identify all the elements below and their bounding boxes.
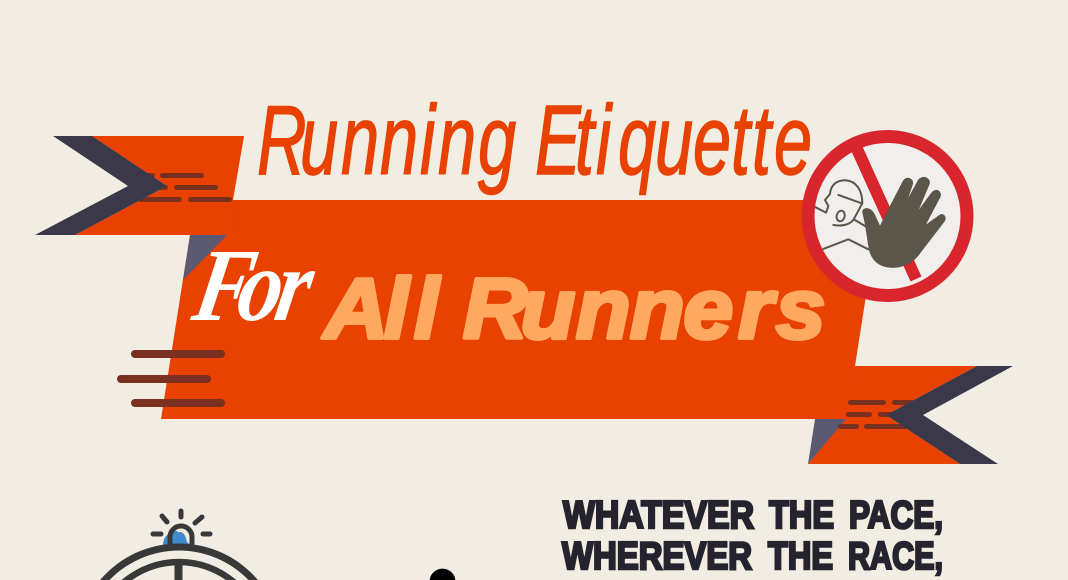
title: Running Etiquette: Running <box>257 85 516 195</box>
banner: upper-left ribbon tail <box>35 136 244 235</box>
title: Running Etiquette: Etiquette <box>535 85 812 195</box>
slogan text: WHEREVER <box>562 535 752 578</box>
subtitle: For: For <box>185 228 324 344</box>
icon: raised hand <box>863 178 944 267</box>
slogan text: THE <box>768 535 833 578</box>
icon: wheel with siren <box>100 511 258 580</box>
slogan text: PACE, <box>849 494 943 537</box>
wheel arcs <box>100 543 258 580</box>
banner: fold shadow upper <box>183 235 227 280</box>
icon: runner silhouette head <box>430 569 455 580</box>
slogan text <box>562 494 943 578</box>
banner: main ribbon <box>161 200 881 419</box>
title banner <box>35 136 1013 464</box>
slogan text: THE <box>769 494 834 537</box>
banner: large speed dashes <box>117 350 225 407</box>
title: Running Etiquette <box>257 85 812 195</box>
banner: lower-right ribbon tail <box>808 366 1013 464</box>
slogan text: WHATEVER <box>563 494 754 537</box>
subtitle: All Runners: Runners <box>463 262 826 357</box>
siren light <box>153 511 210 545</box>
icon: stop hand prohibition sign <box>808 136 967 296</box>
subtitle: All Runners: All <box>322 262 441 357</box>
icon: runner outline <box>816 180 868 249</box>
slogan text: RACE, <box>848 535 943 578</box>
